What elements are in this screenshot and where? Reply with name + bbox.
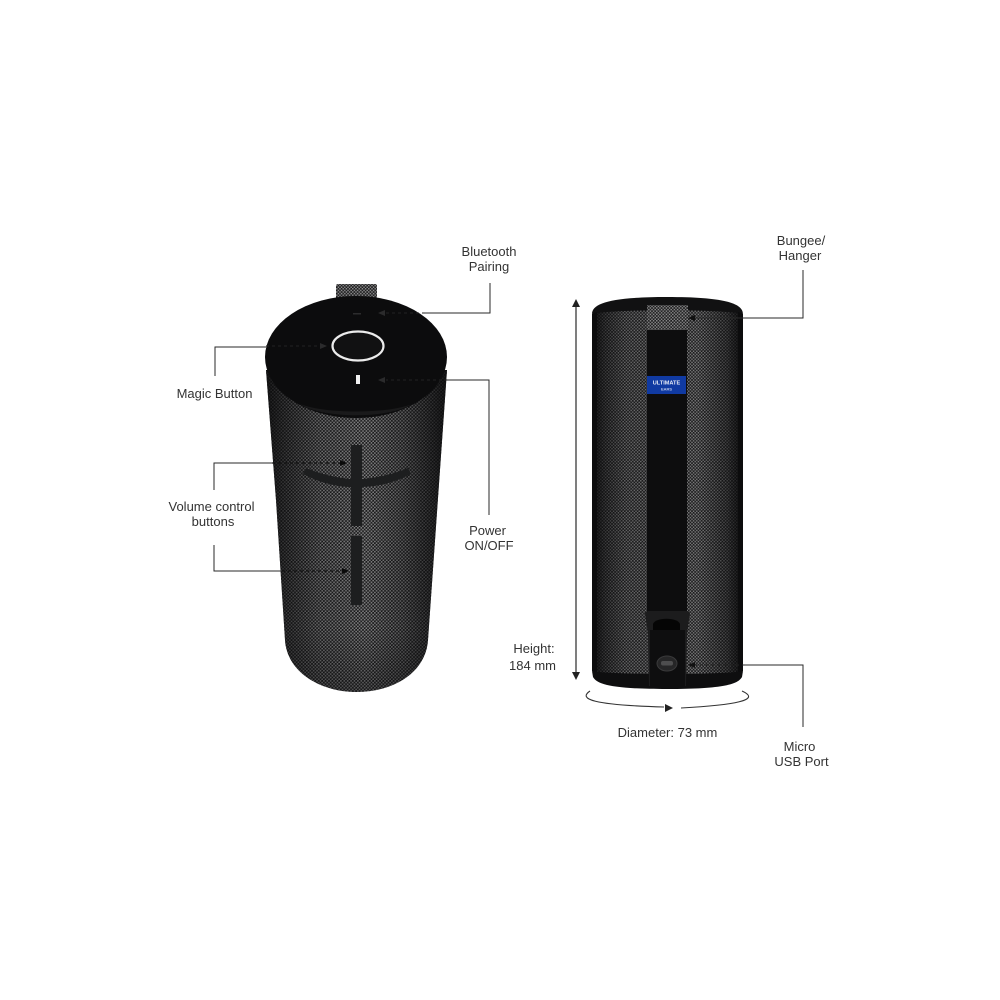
diameter dimension arrow: Diameter: 73 mm [618, 725, 717, 740]
callout: Micro USB Port: Micro [784, 739, 815, 754]
callout: Volume control buttons: buttons [192, 514, 235, 529]
callout: Bungee / Hanger: Bungee/ [777, 233, 826, 248]
power indicator [356, 375, 360, 384]
top rim [592, 297, 743, 314]
blue label: EARS [661, 386, 672, 392]
callout: Micro USB Port [688, 662, 829, 769]
height dimension arrow: 184 mm [509, 658, 556, 673]
callout: Volume control buttons [168, 460, 349, 574]
callout: Magic Button: Magic Button [177, 386, 252, 401]
bungee tab [647, 305, 688, 330]
blue label: ULTIMATE [653, 380, 680, 386]
strap [647, 320, 687, 620]
fabric body [593, 310, 742, 675]
magic button ring [332, 332, 384, 360]
callout: Power ON/OFF: ON/OFF [464, 538, 514, 553]
right speaker: back view [592, 297, 743, 689]
cap lower band [300, 404, 412, 415]
callout: Volume control buttons: Volume control [168, 499, 255, 514]
bungee tab on top [336, 284, 377, 308]
callout: Micro USB Port: USB Port [774, 754, 829, 769]
callout: Bluetooth Pairing [378, 244, 516, 316]
callout: Magic Button [177, 343, 327, 401]
callout: Bungee / Hanger [688, 233, 826, 321]
left speaker: front view [265, 284, 447, 692]
blue label [647, 376, 686, 394]
callout: Bluetooth Pairing: Pairing [469, 259, 509, 274]
bottom rim [592, 671, 743, 689]
bluetooth button [353, 313, 361, 314]
height dimension arrow: Height: [513, 641, 555, 656]
diameter dimension arrow [586, 691, 749, 740]
callout: Power ON/OFF: Power [469, 523, 507, 538]
height dimension arrow [509, 299, 580, 680]
strap clip with USB port [645, 611, 690, 686]
top cap [265, 296, 447, 418]
minus volume button [351, 536, 362, 605]
callout: Bluetooth Pairing: Bluetooth [462, 244, 516, 259]
callout: Power ON/OFF [378, 377, 514, 553]
side edges [592, 312, 743, 672]
callout: Bungee / Hanger: Hanger [779, 248, 822, 263]
fabric body [266, 370, 447, 692]
plus volume button [303, 445, 411, 526]
